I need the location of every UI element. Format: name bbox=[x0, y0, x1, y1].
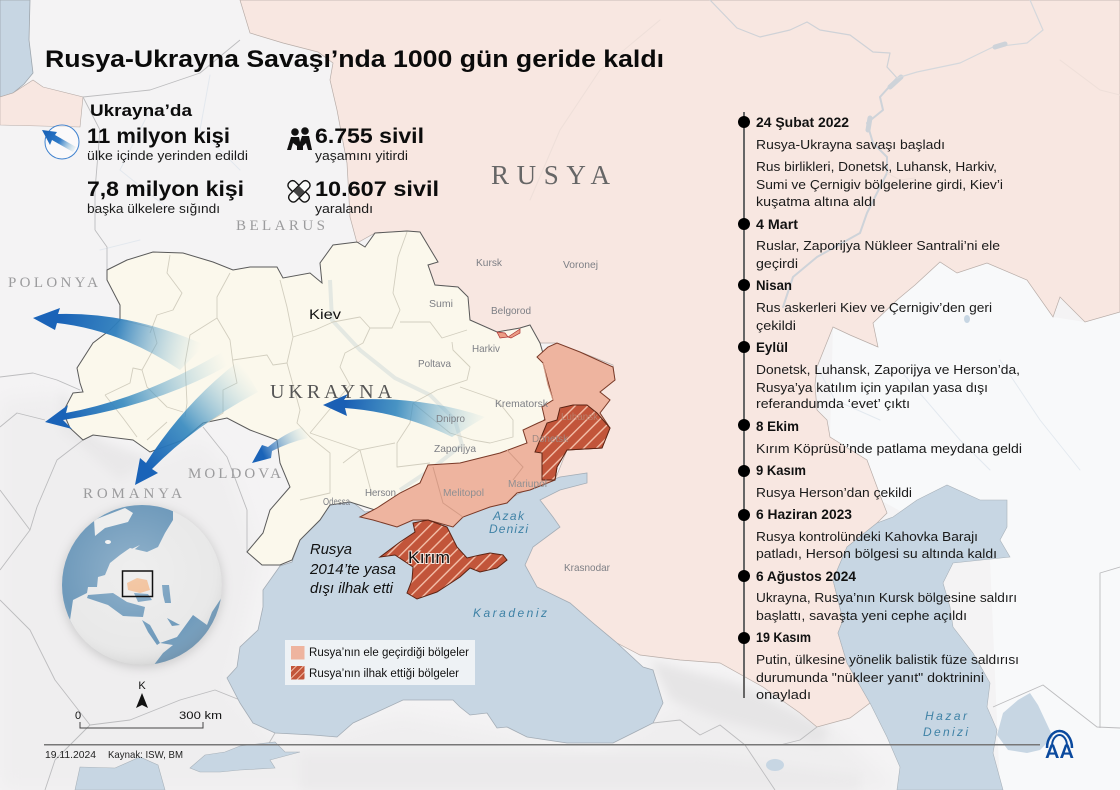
label: Azak Denizi bbox=[489, 509, 528, 536]
heading: Ukrayna’da bbox=[90, 101, 193, 120]
event: 9 Kasım: Rusya Herson’dan çekildi bbox=[756, 485, 912, 500]
label: Kiev: Kiev bbox=[309, 306, 341, 322]
region: annexed Luhansk and Donetsk bbox=[535, 405, 610, 480]
region: Kazakhstan plain bbox=[830, 262, 1120, 790]
event: 8 Ekim: 8 Ekim bbox=[756, 419, 799, 434]
event: Nisan bbox=[738, 278, 992, 333]
label: MOLDOVA: MOLDOVA bbox=[188, 466, 281, 482]
labels: city names: Belgorod bbox=[491, 305, 531, 317]
sea: Marmara and Aegean bbox=[75, 742, 300, 790]
labels: city names: Krematorsk bbox=[495, 398, 549, 410]
event: 19 Kasım: onayladı bbox=[756, 687, 811, 702]
label: Azak Denizi: Denizi bbox=[489, 522, 528, 536]
region: Ukraine bbox=[63, 231, 560, 565]
labels: city names: Mariupol bbox=[508, 478, 547, 490]
stat: refugees: 7,8 milyon kişi bbox=[87, 178, 244, 201]
label: UKRAYNA: UKRAYNA bbox=[270, 381, 393, 403]
north arrow bbox=[136, 680, 148, 708]
footer: date and source: 19.11.2024 bbox=[45, 749, 96, 761]
region: occupied strip near Belgorod bbox=[497, 329, 520, 338]
event: 6 Haziran 2023: patladı, Herson bölgesi su altında kaldı bbox=[756, 546, 997, 561]
event: 24 Şubat 2022: Rusya-Ukrayna savaşı başladı bbox=[756, 137, 945, 152]
event: Nisan: çekildi bbox=[756, 318, 796, 333]
stat: wounded: yaralandı bbox=[315, 201, 373, 216]
event: 19 Kasım: 19 Kasım bbox=[756, 630, 811, 645]
labels: city names: Zaporijya bbox=[434, 443, 476, 455]
panel: timeline bbox=[738, 112, 1022, 702]
callout: 2014 annexation: Rusya bbox=[310, 541, 352, 558]
event: 4 Mart: Ruslar, Zaporijya Nükleer Santrali’ni ele bbox=[756, 238, 1000, 253]
legend bbox=[285, 640, 475, 685]
callout: 2014 annexation: 2014’te yasa bbox=[309, 561, 396, 578]
event: 6 Haziran 2023: 6 Haziran 2023 bbox=[756, 507, 852, 522]
stat: wounded: 10.607 sivil bbox=[315, 178, 439, 201]
footer: date and source bbox=[45, 749, 183, 761]
event: 6 Ağustos 2024 bbox=[738, 569, 1017, 623]
legend: Rusya’nın ilhak ettiği bölgeler bbox=[309, 668, 459, 680]
arrow: to Moldova bbox=[252, 427, 308, 463]
scale bar: 0 bbox=[75, 710, 81, 722]
label: Dnipro: Dnipro bbox=[436, 413, 465, 425]
event: 19 Kasım: durumunda "nükleer yanıt" doktrinini bbox=[756, 670, 984, 685]
label: POLONYA: POLONYA bbox=[8, 275, 98, 291]
region: Kaliningrad bbox=[0, 80, 83, 127]
stat: killed bbox=[315, 125, 424, 163]
event: 8 Ekim: Kırım Köprüsü’nde patlama meydana geldi bbox=[756, 441, 1022, 456]
event: 6 Haziran 2023 bbox=[738, 507, 997, 561]
labels: city names: Melitopol bbox=[443, 487, 484, 499]
sea: Black Sea and Azov bbox=[227, 473, 663, 743]
event: 24 Şubat 2022: Sumi ve Çernigiv bölgelerine girdi, Kiev’i bbox=[756, 177, 1003, 192]
event: Eylül: referandumda ‘evet’ çıktı bbox=[756, 396, 910, 411]
event: 4 Mart: 4 Mart bbox=[756, 217, 799, 232]
labels: city names: Herson bbox=[365, 487, 396, 499]
arrow: central displacement bbox=[323, 394, 485, 437]
stat: displaced: ülke içinde yerinden edildi bbox=[87, 148, 248, 163]
labels: city names bbox=[323, 257, 610, 574]
label: ROMANYA: ROMANYA bbox=[83, 486, 182, 502]
title: Rusya-Ukrayna Savaşı’nda 1000 gün geride kaldı bbox=[45, 46, 664, 73]
labels: city names: Kursk bbox=[476, 257, 503, 269]
event: 24 Şubat 2022 bbox=[738, 115, 1003, 209]
event: 9 Kasım bbox=[738, 463, 912, 500]
callout: 2014 annexation bbox=[309, 541, 396, 597]
label: Kırım: Kırım bbox=[408, 548, 450, 567]
stat: wounded bbox=[315, 178, 439, 216]
label: Karadeniz: Karadeniz bbox=[473, 606, 547, 620]
scale bar bbox=[75, 710, 222, 728]
labels: city names: Sumi bbox=[429, 298, 453, 310]
region: Crimea bbox=[380, 520, 507, 599]
icon: bandage bbox=[286, 179, 312, 204]
arrow: to Romania bbox=[135, 360, 258, 485]
event: 24 Şubat 2022: 24 Şubat 2022 bbox=[756, 115, 849, 130]
logo: AA: AA bbox=[1045, 742, 1074, 763]
oblast borders bbox=[105, 232, 513, 500]
labels: city names: Odessa bbox=[323, 496, 350, 508]
labels: city names: Krasnodar bbox=[564, 562, 610, 574]
event: 6 Ağustos 2024: başlattı, savaşta yeni cephe açıldı bbox=[756, 608, 967, 623]
event: 24 Şubat 2022: kuşatma altına aldı bbox=[756, 194, 876, 209]
stat: killed: 6.755 sivil bbox=[315, 125, 424, 148]
event: Eylül: Donetsk, Luhansk, Zaporijya ve Herson’da, bbox=[756, 362, 1020, 377]
footer: date and source: Kaynak: ISW, BM bbox=[108, 749, 183, 761]
event: 24 Şubat 2022: Rus birlikleri, Donetsk, Luhansk, Harkiv, bbox=[756, 159, 997, 174]
panel: Ukraine figures bbox=[42, 101, 439, 216]
footer rule bbox=[44, 744, 1040, 746]
event: 4 Mart bbox=[738, 217, 1000, 271]
occupied internal borders bbox=[433, 363, 553, 517]
event: Eylül bbox=[738, 340, 1020, 411]
labels: city names: Luhansk bbox=[561, 411, 599, 423]
stat: displaced: 11 milyon kişi bbox=[87, 125, 230, 148]
region: Russia bbox=[240, 0, 1120, 727]
event: 6 Ağustos 2024: Ukrayna, Rusya’nın Kursk bölgesine saldırı bbox=[756, 590, 1017, 605]
river: Dnieper bbox=[330, 280, 462, 490]
scale bar: 300 km bbox=[179, 710, 222, 722]
stat: killed: yaşamını yitirdi bbox=[315, 148, 408, 163]
label: RUSYA: RUSYA bbox=[491, 160, 610, 190]
region: Russian-occupied territories bbox=[360, 343, 615, 527]
icon: displaced arrow bbox=[42, 125, 79, 159]
sea: Baltic bbox=[0, 0, 33, 97]
sea: Caspian bbox=[833, 485, 1010, 790]
event: Eylül: Rusya’ya katılım için yapılan yasa dışı bbox=[756, 380, 988, 395]
event: Nisan: Rus askerleri Kiev ve Çernigiv’den geri bbox=[756, 300, 992, 315]
stat: refugees: başka ülkelere sığındı bbox=[87, 201, 220, 216]
callout: 2014 annexation: dışı ilhak etti bbox=[310, 580, 394, 597]
labels: city names: Voronej bbox=[563, 259, 598, 271]
labels: city names: Poltava bbox=[418, 358, 451, 370]
event: 9 Kasım: 9 Kasım bbox=[756, 463, 806, 478]
label: Azak Denizi: Azak bbox=[492, 509, 525, 523]
event: Eylül: Eylül bbox=[756, 340, 788, 355]
sea: Kara-Bogaz bbox=[997, 693, 1053, 753]
rivers bbox=[100, 0, 1120, 470]
legend: Rusya’nın ele geçirdiği bölgeler bbox=[309, 647, 469, 659]
arrow: to south-west bbox=[45, 352, 232, 429]
event: 19 Kasım bbox=[738, 630, 1019, 702]
event: 8 Ekim bbox=[738, 419, 1022, 456]
event: 4 Mart: geçirdi bbox=[756, 256, 798, 271]
event: 6 Haziran 2023: Rusya kontrolündeki Kahovka Barajı bbox=[756, 529, 978, 544]
label: Hazar Denizi bbox=[923, 709, 968, 739]
label: BELARUS: BELARUS bbox=[236, 218, 325, 234]
icon: people bbox=[287, 127, 312, 150]
event: 19 Kasım: Putin, ülkesine yönelik balistik füze saldırısı bbox=[756, 652, 1019, 667]
stat: displaced bbox=[87, 125, 248, 163]
timeline axis bbox=[743, 112, 745, 698]
label: Hazar Denizi: Denizi bbox=[923, 725, 968, 739]
stat: refugees bbox=[87, 178, 244, 216]
lakes bbox=[766, 315, 970, 771]
labels: city names: Donetsk bbox=[532, 433, 569, 445]
logo: AA bbox=[1045, 731, 1074, 763]
labels: city names: Harkiv bbox=[472, 343, 501, 355]
arrow: to Poland bbox=[33, 308, 205, 370]
event: 6 Ağustos 2024: 6 Ağustos 2024 bbox=[756, 569, 856, 584]
north arrow: K bbox=[138, 680, 146, 692]
globe locator bbox=[58, 502, 226, 672]
event: Nisan: Nisan bbox=[756, 278, 792, 293]
label: Hazar Denizi: Hazar bbox=[925, 709, 968, 723]
